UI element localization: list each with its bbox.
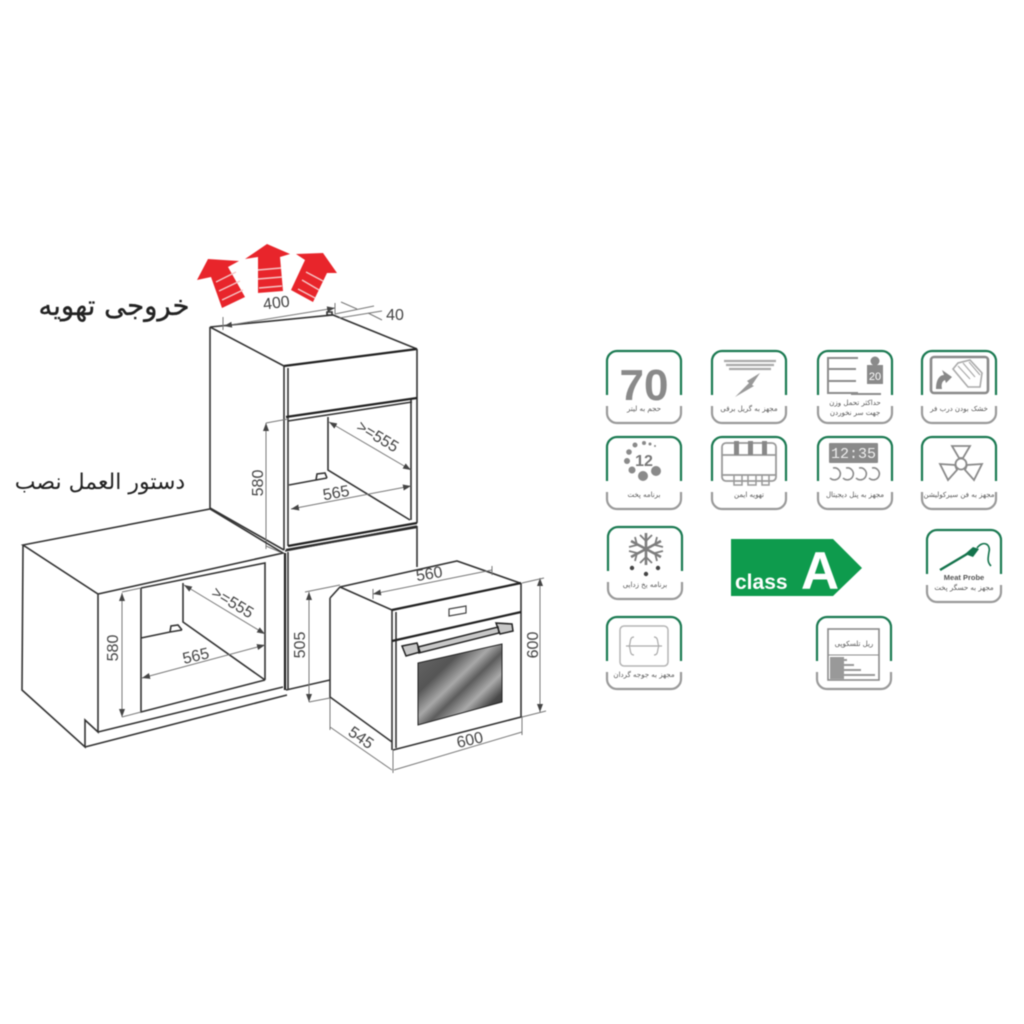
- icon: 70 litre volume: [607, 351, 681, 423]
- dimension: upper cabinet width 400: [223, 293, 335, 330]
- icon: safe ventilation: تهویه ایمن: [734, 491, 764, 499]
- icon: red ventilation arrows: [197, 244, 337, 308]
- icon: 12 cooking programmes: [607, 437, 681, 509]
- badge: energy class A: A: [801, 542, 839, 601]
- icon: safe ventilation: [712, 437, 786, 509]
- icon: maximum weight shelf: 20: [869, 371, 881, 383]
- diagram: middle column: [285, 526, 417, 690]
- icon: cool oven door: [922, 351, 996, 423]
- icon: electric grill: مجهز به گریل برقی: [720, 404, 778, 413]
- dimension: lower cabinet 580: 580: [105, 635, 122, 661]
- dimension: upper cabinet width 400: 400: [262, 293, 291, 314]
- icon: meat probe: Meat Probe: [944, 573, 984, 582]
- icon: 70 litre volume: حجم به لیتر: [626, 405, 661, 413]
- dimension: upper cabinet depth 555: [329, 418, 411, 470]
- dimension: lower cabinet depth 555: [184, 584, 265, 634]
- dimension: oven width 600: 600: [455, 729, 485, 752]
- dimension: oven depth 545: [330, 698, 392, 770]
- dimension: vent depth 40: [335, 302, 404, 324]
- diagram: upper wall cabinet: [210, 312, 417, 550]
- dimension: lower cabinet depth 555: >=555: [208, 584, 256, 622]
- dimension: niche height 505: 505: [292, 632, 309, 658]
- icon: digital panel: مجهز به پنل دیجیتال: [826, 491, 884, 499]
- icon: meat probe: مجهز به حسگر پخت: [934, 583, 994, 592]
- icon: rotisserie: مجهز به جوجه گردان: [613, 670, 675, 679]
- badge: energy class A: class: [735, 571, 788, 594]
- dimension: upper cabinet 580: 580: [250, 470, 267, 496]
- badge: energy class A: [731, 539, 862, 601]
- dimension: upper cabinet depth 555: >=555: [353, 418, 401, 456]
- icon: defrost programme: برنامه یخ زدایی: [623, 581, 667, 589]
- oven window: [418, 644, 502, 725]
- icon: circulation fan: مجهز به فن سیرکولیشن: [923, 491, 995, 499]
- diagram: lower-left cabinet: [22, 509, 287, 747]
- diagram: oven: [330, 561, 521, 750]
- dimension: upper cabinet 580: [250, 419, 288, 552]
- dimension: lower cabinet 580: [105, 593, 141, 717]
- oven handle: [402, 623, 513, 656]
- dimension: oven top width 560: 560: [415, 564, 444, 585]
- icon: cool oven door: خشک بودن درب فر: [929, 405, 988, 413]
- icon: meat probe: [927, 530, 1001, 602]
- icon: rotisserie: [607, 617, 681, 689]
- icon: telescopic rail: ریل تلسکوپی: [835, 640, 873, 648]
- dimension: oven height 600: [522, 578, 546, 717]
- icon: 12 cooking programmes: برنامه پخت: [628, 491, 661, 499]
- icon: 12 cooking programmes: 12: [635, 453, 653, 470]
- dimension: niche height 505: [292, 585, 340, 702]
- dimension: oven width 600: [393, 716, 522, 773]
- icon: digital panel: 12:35: [831, 446, 876, 463]
- icon: circulation fan: [922, 437, 996, 509]
- dimension: oven depth 545: 545: [345, 724, 376, 753]
- icon: electric grill: [712, 351, 786, 423]
- dimension: oven height 600: 600: [525, 632, 542, 658]
- icon: defrost programme: [608, 527, 682, 599]
- heading: ventilation outlet: خروجی تهویه: [38, 290, 190, 322]
- icon: maximum weight shelf: جهت سر نخوردن: [830, 409, 880, 417]
- dimension: vent depth 40: 40: [386, 307, 404, 324]
- dimension: upper cabinet width 565: [291, 483, 411, 509]
- icon: 70 litre volume: 70: [620, 361, 668, 410]
- dimension: upper cabinet width 565: 565: [322, 483, 351, 504]
- icon: digital panel: [818, 437, 892, 509]
- dimension: oven top width 560: [373, 564, 492, 599]
- heading: installation guide: دستور العمل نصب: [15, 470, 185, 495]
- dimension: lower cabinet width 565: [142, 645, 265, 678]
- icon: telescopic rail: [817, 617, 891, 689]
- dimension: lower cabinet width 565: 565: [181, 645, 211, 668]
- icon: maximum weight shelf: حداکثر تحمل وزن: [829, 399, 881, 407]
- icon: maximum weight shelf: [818, 351, 892, 423]
